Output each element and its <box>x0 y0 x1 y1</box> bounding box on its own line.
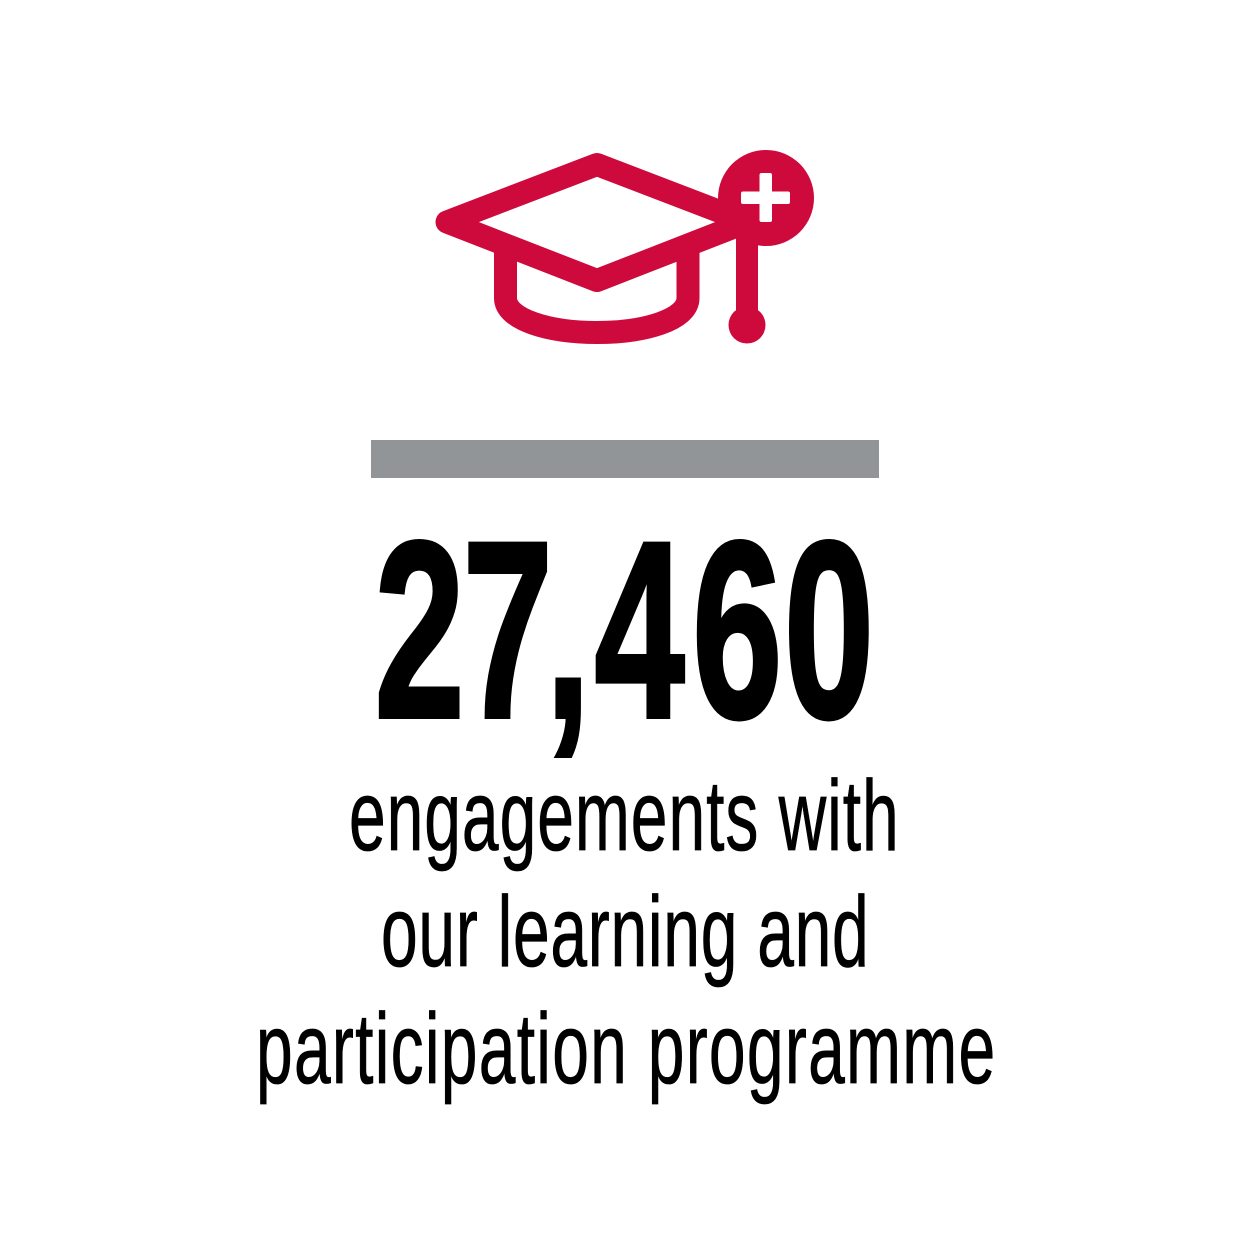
description line 2: our learning and <box>381 875 869 987</box>
icon: tassel <box>728 225 766 344</box>
icon: plus badge <box>718 150 814 246</box>
divider bar <box>371 440 879 478</box>
description line 3: participation programme <box>256 992 995 1104</box>
description line 1: engagements with <box>349 759 899 871</box>
description text <box>256 759 995 1104</box>
icon: cap base <box>506 252 688 332</box>
icon: mortarboard top <box>447 164 747 280</box>
icon: graduation cap with plus badge <box>447 150 814 344</box>
headline number: 27,460 <box>375 489 874 771</box>
